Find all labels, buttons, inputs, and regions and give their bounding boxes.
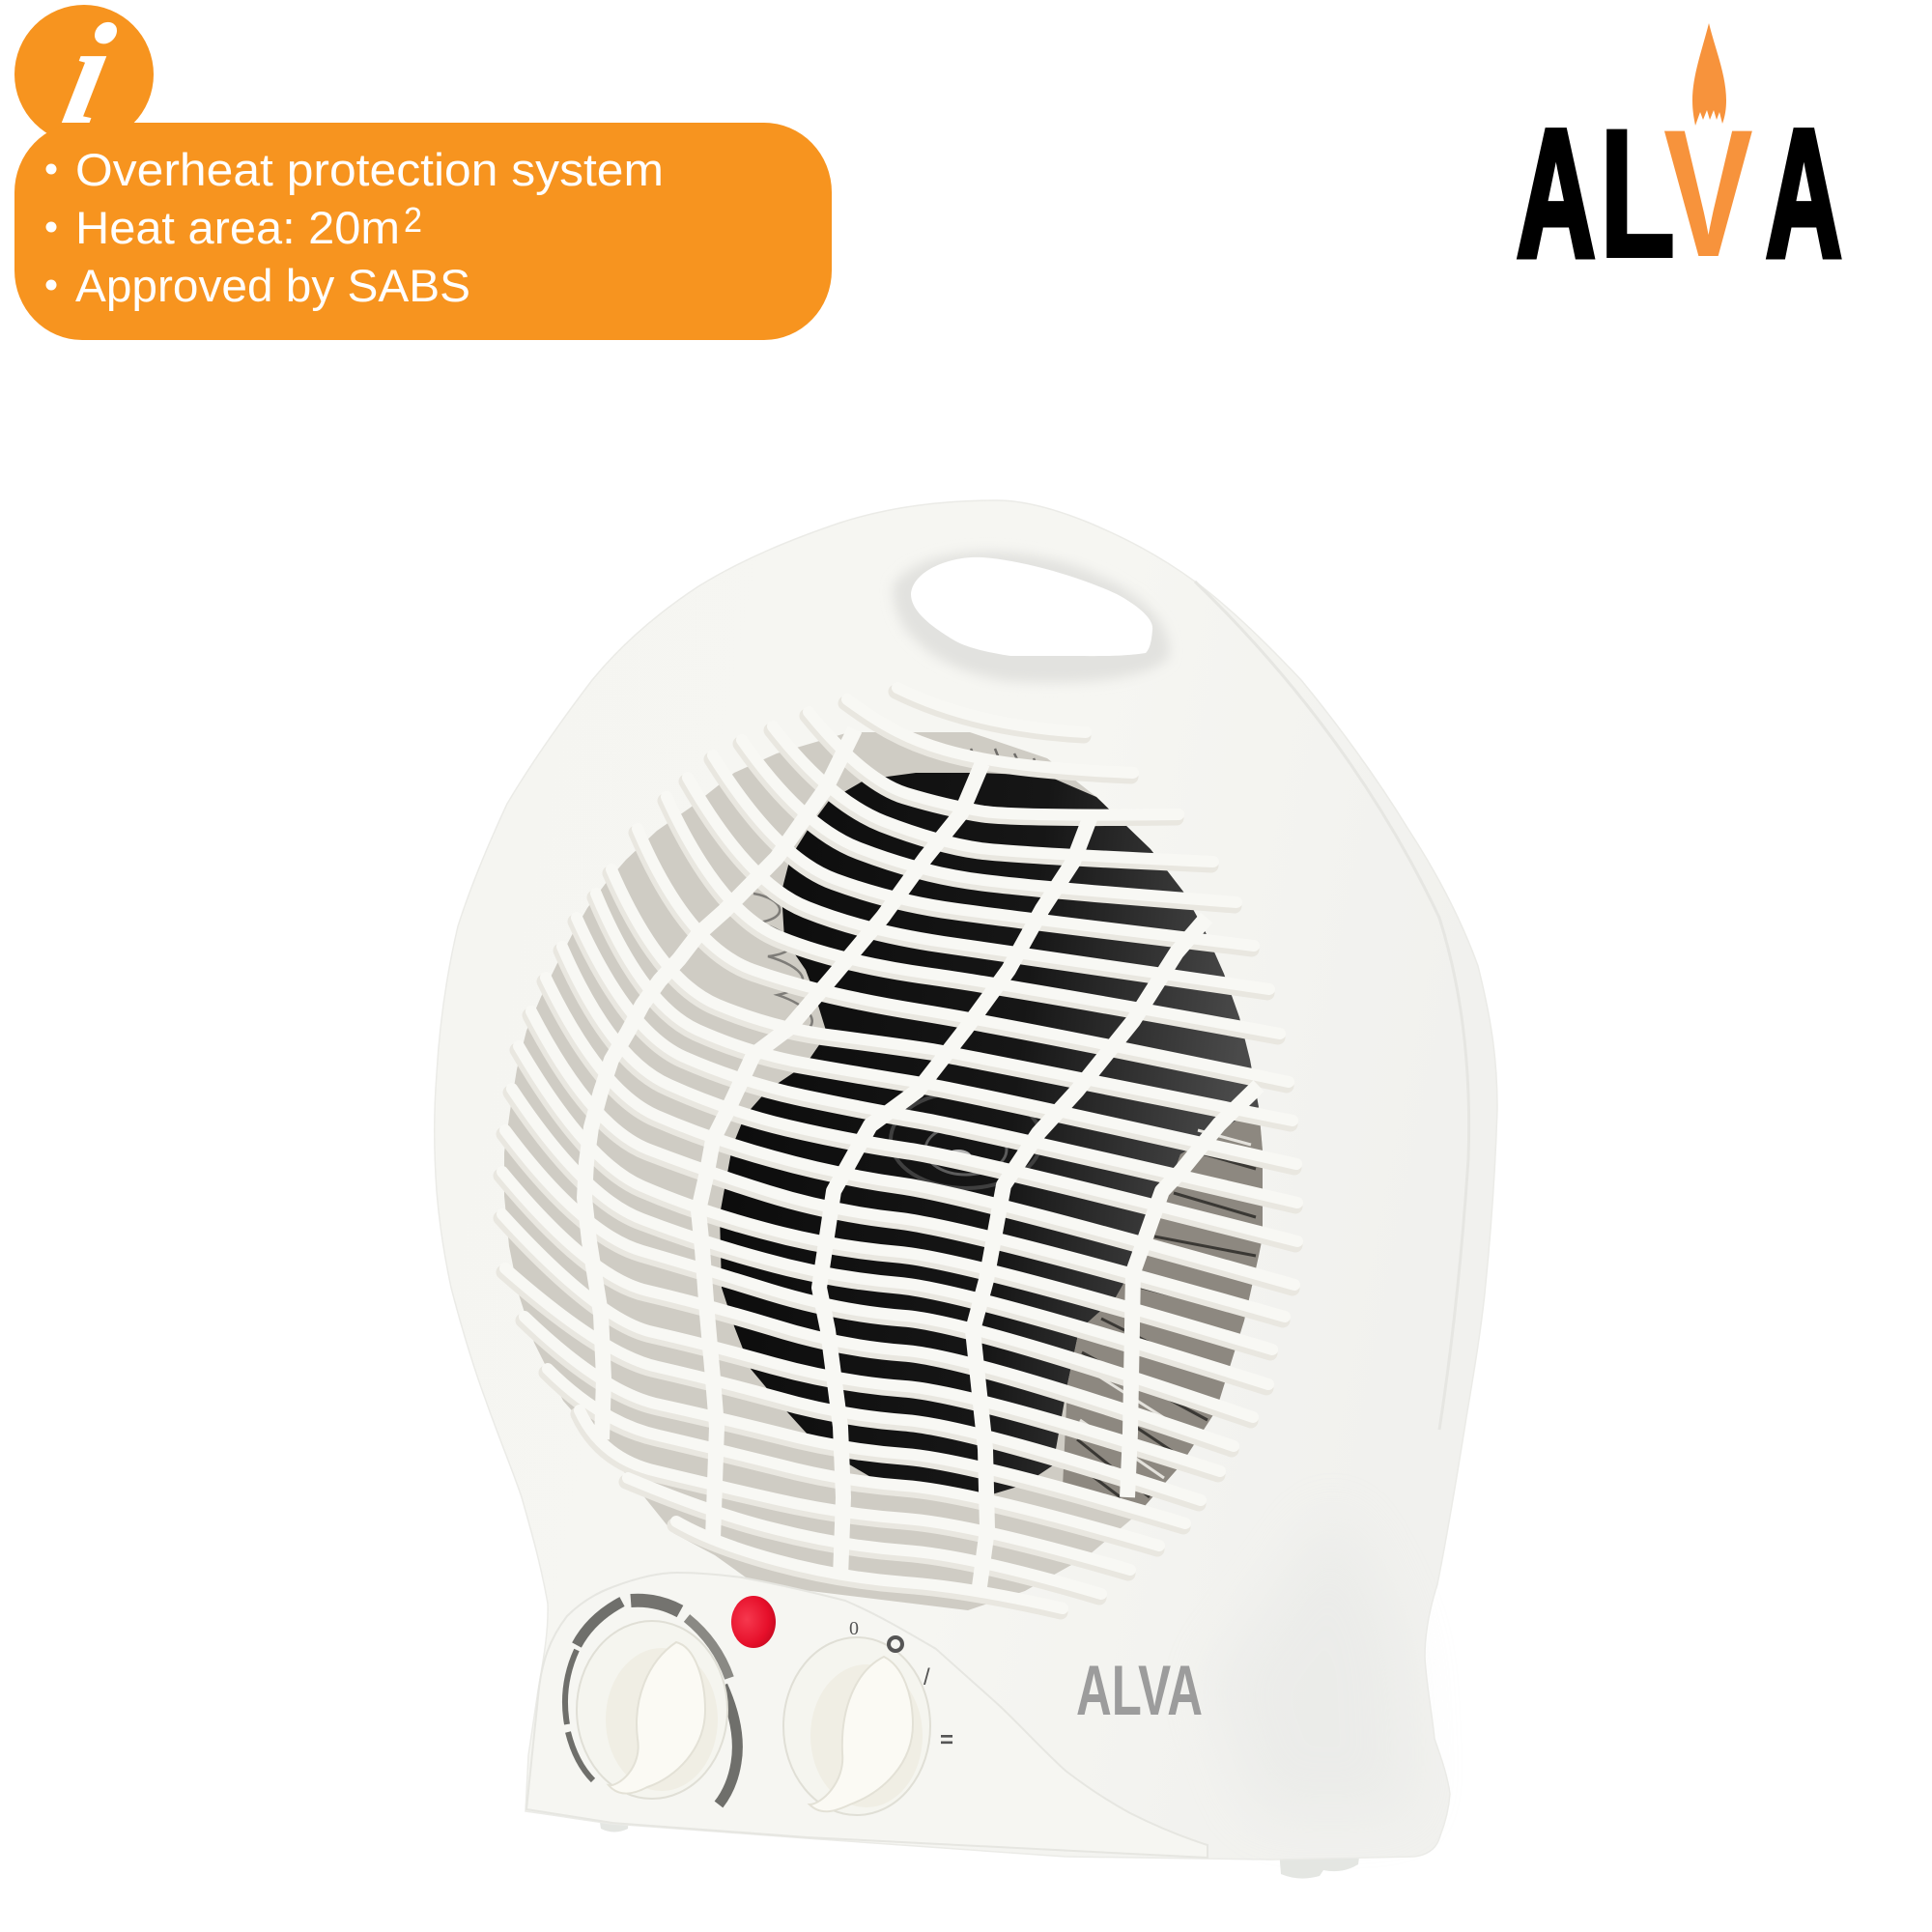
brand logo <box>1517 23 1842 296</box>
dial labels <box>849 1618 953 1753</box>
icon: flame <box>1692 23 1726 126</box>
dial labels: 0 <box>849 1618 859 1639</box>
grille ribs <box>502 688 1297 1608</box>
heater body <box>435 500 1497 1860</box>
heating coil region <box>1063 1107 1263 1514</box>
dial labels: = <box>940 1727 953 1753</box>
top wires <box>971 749 1038 770</box>
feature list: 2 <box>404 200 422 240</box>
feature list <box>46 144 664 311</box>
logo text: A <box>1766 92 1842 295</box>
temperature scale <box>565 1601 737 1804</box>
logo text <box>1517 92 1842 296</box>
grille rib ledges <box>500 692 1295 1612</box>
heater interior: motor housing <box>720 773 1259 1500</box>
left dial <box>577 1621 727 1799</box>
panel: feature list background <box>14 123 832 340</box>
control panel <box>526 1573 1208 1858</box>
feature list: Heat area: 20m <box>75 202 400 253</box>
lower body shading <box>1208 1507 1412 1816</box>
icon: fan setting <box>889 1637 902 1651</box>
logo text: L <box>1600 92 1675 296</box>
logo text: V <box>1663 93 1753 296</box>
info panel <box>14 0 832 340</box>
indicator light <box>731 1596 776 1648</box>
grille opening <box>504 732 1263 1610</box>
handle opening <box>911 557 1152 656</box>
handle recess shading <box>894 552 1169 683</box>
right dial <box>783 1637 930 1815</box>
body logo: ALVA <box>1076 1652 1203 1730</box>
logo text: A <box>1517 92 1595 295</box>
icon: info circle <box>14 0 154 155</box>
heater feet <box>599 1816 1360 1879</box>
feature list: Overheat protection system <box>75 144 664 195</box>
heater <box>435 500 1497 1879</box>
fan hub <box>891 1092 1041 1188</box>
rear shell ridge <box>1195 582 1469 1430</box>
dial labels: / <box>923 1664 930 1690</box>
left coil wires <box>753 894 812 1038</box>
feature list: Approved by SABS <box>75 260 470 311</box>
grille cross ribs <box>584 729 1259 1594</box>
